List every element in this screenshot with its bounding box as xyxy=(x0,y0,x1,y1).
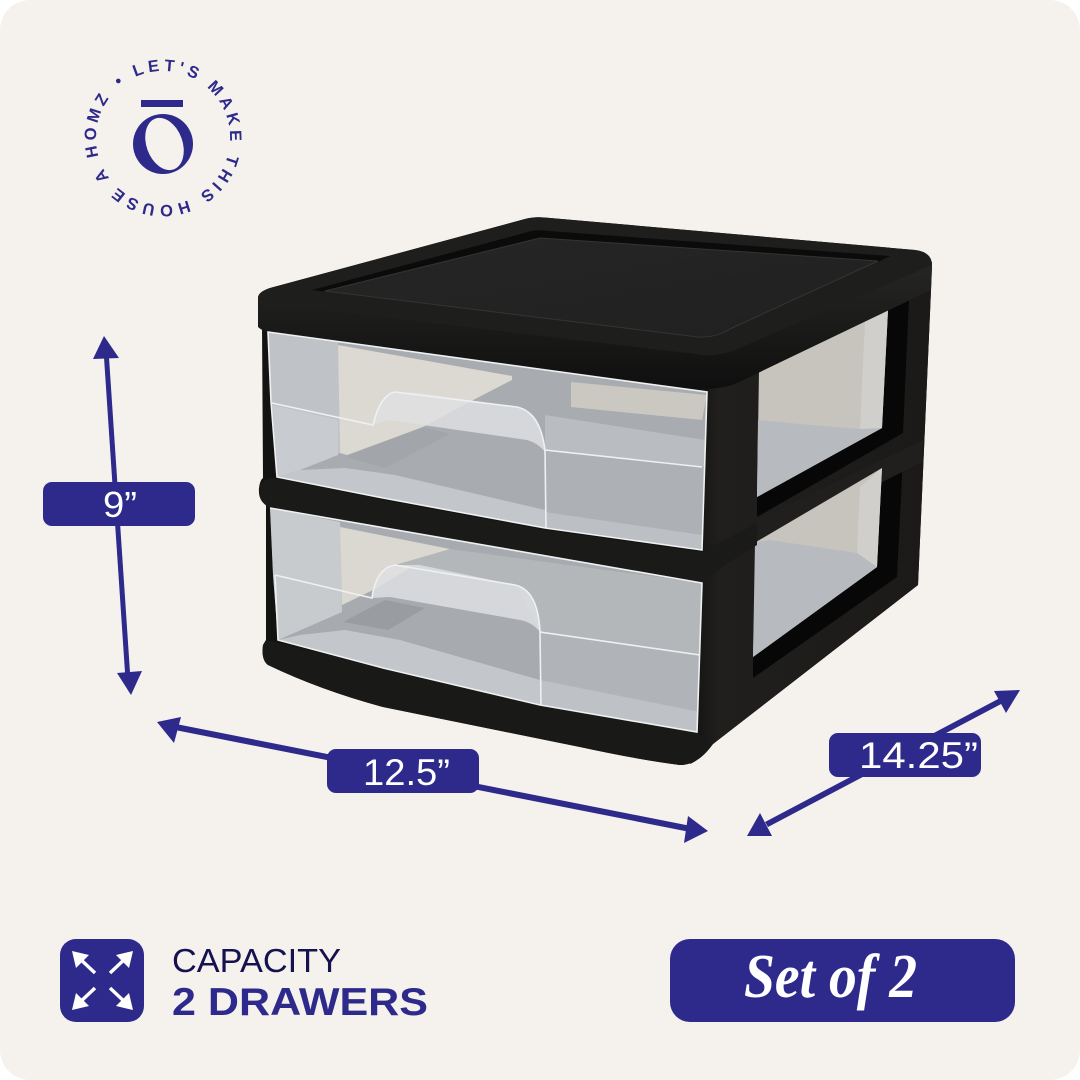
capacity text xyxy=(172,942,428,1024)
depth arrow xyxy=(747,690,1020,836)
logo mark xyxy=(133,112,193,176)
upper drawer edges xyxy=(268,332,707,550)
upper drawer xyxy=(260,325,710,555)
dimension: height 9 in xyxy=(43,336,195,695)
upper drawer handle xyxy=(373,392,545,452)
depth label: 14.25” xyxy=(859,735,978,776)
upper drawer interior xyxy=(260,325,710,555)
width arrow xyxy=(157,717,708,843)
lower drawer interior xyxy=(270,508,702,732)
capacity text: CAPACITY xyxy=(172,942,341,979)
dimension: width 12.5 in xyxy=(157,717,708,843)
capacity text: 2 DRAWERS xyxy=(172,981,428,1024)
width label xyxy=(327,749,479,793)
height arrow xyxy=(93,336,142,695)
middle front rail xyxy=(260,478,757,583)
lower side recess xyxy=(753,457,903,678)
lid top surface xyxy=(325,238,878,337)
logo badge xyxy=(84,60,242,216)
set of 2 badge: Set of 2 xyxy=(744,943,917,1011)
set of 2 badge xyxy=(670,939,1015,1022)
upper side recess xyxy=(757,300,909,517)
height label: 9” xyxy=(103,484,137,525)
middle side rail xyxy=(757,440,923,545)
depth label xyxy=(829,733,981,777)
product: two-drawer storage unit xyxy=(258,217,932,765)
width label: 12.5” xyxy=(363,752,450,793)
lower drawer xyxy=(260,500,710,740)
logo bar xyxy=(141,100,183,107)
dimension: depth 14.25 in xyxy=(747,690,1020,836)
lid top rim xyxy=(258,217,932,355)
lid recessed top xyxy=(312,230,890,292)
lower drawer edges xyxy=(270,508,702,732)
lid front band xyxy=(258,262,932,389)
lower drawer handle xyxy=(372,565,540,632)
right side frame xyxy=(690,290,931,764)
bottom front rail xyxy=(263,640,712,765)
upper side window xyxy=(757,310,888,497)
height label xyxy=(43,482,195,526)
logo ring text: • LET'S MAKE THIS HOUSE A HOMZ xyxy=(84,60,242,216)
lower side window xyxy=(753,468,882,657)
capacity icon xyxy=(60,939,144,1022)
unit silhouette xyxy=(258,217,932,765)
